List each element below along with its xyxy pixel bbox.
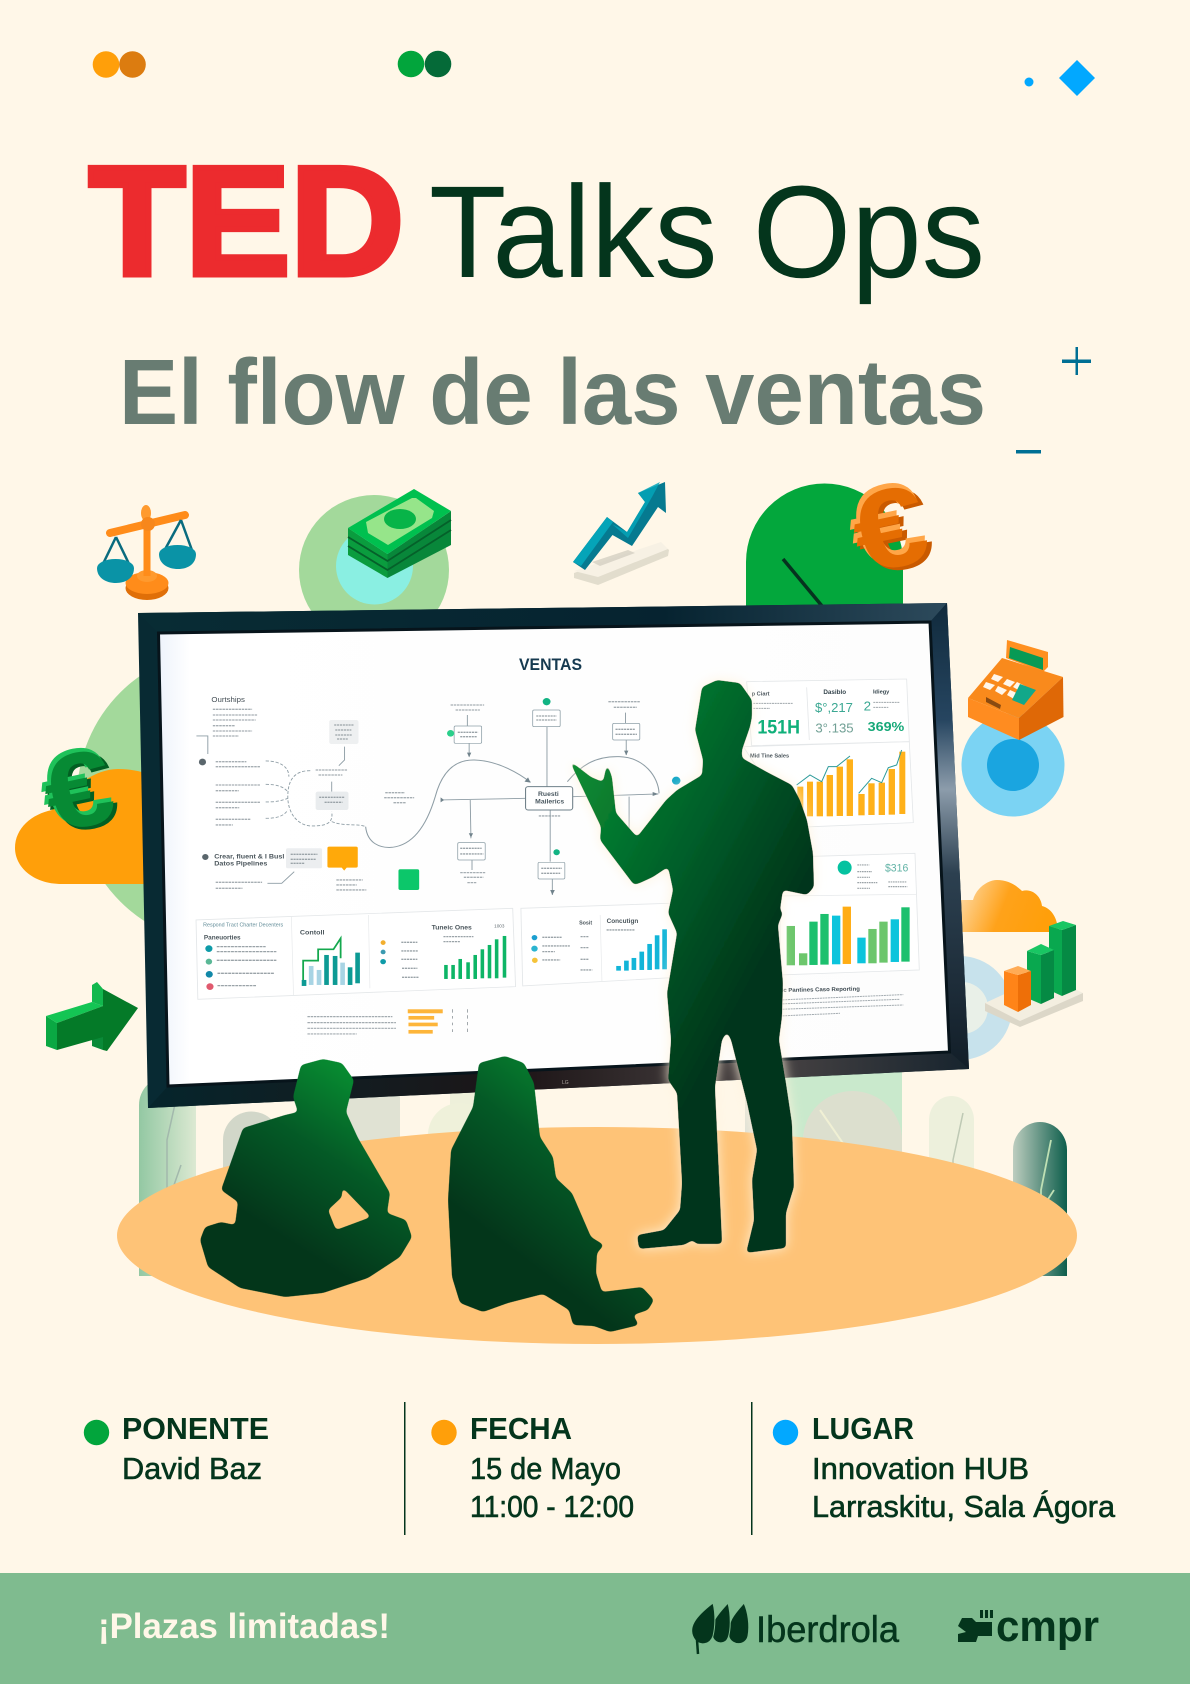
report text block xyxy=(780,987,903,1016)
footer note and orange bars xyxy=(307,1009,467,1034)
icon: green euro: € xyxy=(30,723,121,853)
flow section caption: Datos Pipelines xyxy=(214,860,267,867)
dashboard panel: teal chart and green chart: Tuneic Ones xyxy=(432,924,472,931)
green callout xyxy=(398,869,419,890)
footer band xyxy=(0,1573,1190,1684)
info column: fecha xyxy=(431,1411,634,1524)
logo: cmpr: cmpr xyxy=(996,1602,1099,1651)
date and time: 15 de Mayo xyxy=(470,1451,621,1486)
divider 2 xyxy=(751,1402,752,1535)
icon: green arrow xyxy=(46,982,138,1051)
logo: Iberdrola xyxy=(692,1603,899,1654)
icon: orange euro: € xyxy=(841,460,938,597)
icon: orange euro: € xyxy=(845,462,942,599)
orange bar chart panel xyxy=(743,742,913,827)
decorative orange dots xyxy=(93,51,146,78)
KPI panel xyxy=(747,679,909,746)
dashboard panel: teal chart and green chart: 1003 xyxy=(494,923,505,928)
screen content: KPI tiles and charts on the right xyxy=(743,679,919,1016)
footer call to action: ¡Plazas limitadas! xyxy=(98,1607,390,1646)
bullet xyxy=(773,1420,798,1445)
venue xyxy=(812,1451,1116,1524)
dashboard panel: blue chart: Sosit xyxy=(579,920,592,926)
flow diagram arrowheads xyxy=(441,751,658,895)
KPI panel: 369% xyxy=(868,719,904,734)
value: David Baz xyxy=(122,1451,262,1486)
date and time: 11:00 - 12:00 xyxy=(470,1489,634,1524)
title xyxy=(89,134,985,308)
green and blue bar chart panel: $316 xyxy=(885,863,908,875)
heading: FECHA xyxy=(470,1411,572,1446)
flow box inner text xyxy=(291,716,637,873)
screen content: flow diagram and left-bottom panels xyxy=(196,695,690,1034)
subtitle: El flow de las ventas xyxy=(119,340,986,444)
icon: green euro: € xyxy=(33,726,124,856)
dashboard panel: teal chart and green chart: Contoll xyxy=(300,929,325,936)
flow diagram heading and text: Ourtships xyxy=(211,695,245,704)
icon: green euro: € xyxy=(36,728,127,858)
platform ellipse xyxy=(117,1127,1077,1344)
bullet xyxy=(84,1420,109,1445)
KPI panel: $°,217 xyxy=(815,700,853,715)
flow box inner text: Mailerics xyxy=(535,798,565,805)
dashboard panel: blue chart xyxy=(521,903,690,986)
divider 1 xyxy=(404,1402,406,1535)
orange bar chart panel: Mid Tine Sales xyxy=(750,753,789,759)
flow diagram dots xyxy=(199,698,680,860)
icon: balance scale xyxy=(97,505,196,600)
dashboard panel: teal chart and green chart: Paneuorties xyxy=(204,934,241,941)
monitor screen xyxy=(158,622,950,1086)
icon: cash register xyxy=(968,640,1064,740)
KPI panel: 151H xyxy=(757,717,800,738)
icon: rising chart arrow on plinth xyxy=(573,482,669,585)
report text block: Ic Pantines Caso Reporting xyxy=(782,987,861,994)
background shape: light green circle xyxy=(77,649,373,945)
silhouette: standing presenter xyxy=(569,680,814,1253)
flow section caption: Crear, fluent & I Busl xyxy=(214,853,284,860)
heading: LUGAR xyxy=(812,1411,914,1446)
icon: orange euro: € xyxy=(838,456,935,593)
decorative green dots xyxy=(398,51,451,77)
decorative minus sign xyxy=(1016,450,1041,454)
green and blue bar chart panel xyxy=(780,853,919,975)
KPI panel: p Ciart xyxy=(752,691,770,697)
date and time xyxy=(470,1451,634,1524)
heading: PONENTE xyxy=(122,1411,269,1446)
silhouette: seated person xyxy=(200,1059,412,1297)
venue: Innovation HUB xyxy=(812,1451,1029,1486)
background shape: peach cloud xyxy=(955,880,1058,932)
KPI panel: 2 xyxy=(864,699,871,714)
KPI panel: Idiegy xyxy=(873,689,890,695)
monitor brand mark: LG xyxy=(562,1080,569,1086)
icon: 3D bar chart on tray xyxy=(985,921,1083,1027)
silhouette: kneeling person xyxy=(448,1056,654,1332)
logo: Iberdrola: Iberdrola xyxy=(756,1609,899,1650)
background shape: green circle with cyan core xyxy=(299,495,449,645)
background shape: green arch xyxy=(746,484,903,640)
monitor frame xyxy=(138,603,969,1108)
background shape: orange cloud xyxy=(15,769,160,884)
dashboard panel: teal chart and green chart: Respond Tract Charter Decenters xyxy=(203,923,284,929)
dashboard panel: blue chart: Concutign xyxy=(607,918,639,925)
monitor xyxy=(138,603,969,1108)
flow diagram heading and text xyxy=(211,695,641,890)
background shape: blue circle xyxy=(962,714,1064,816)
flow section caption xyxy=(214,853,284,867)
info column: lugar xyxy=(773,1411,1116,1524)
KPI panel: 3°.135 xyxy=(815,721,854,736)
info column: ponente xyxy=(84,1411,269,1486)
flow diagram connectors xyxy=(196,713,659,895)
icon: money stack xyxy=(348,489,451,578)
orange callout xyxy=(327,847,358,871)
dashboard panel: teal chart and green chart xyxy=(196,908,516,999)
flow box inner text: Ruesti xyxy=(538,791,559,798)
background shape: pale blue ring xyxy=(908,956,1012,1060)
title word: TED: TED xyxy=(89,134,404,308)
venue: Larraskitu, Sala Ágora xyxy=(812,1489,1116,1524)
screen heading: VENTAS xyxy=(519,656,582,674)
bullet xyxy=(431,1420,457,1445)
background plants row xyxy=(139,1050,1067,1300)
decorative plus sign xyxy=(1062,347,1091,375)
decorative blue dot and diamond xyxy=(1024,60,1095,96)
title words: Talks Ops: Talks Ops xyxy=(429,158,985,305)
flow diagram boxes xyxy=(286,710,640,879)
KPI panel: Dasiblo xyxy=(823,689,846,696)
